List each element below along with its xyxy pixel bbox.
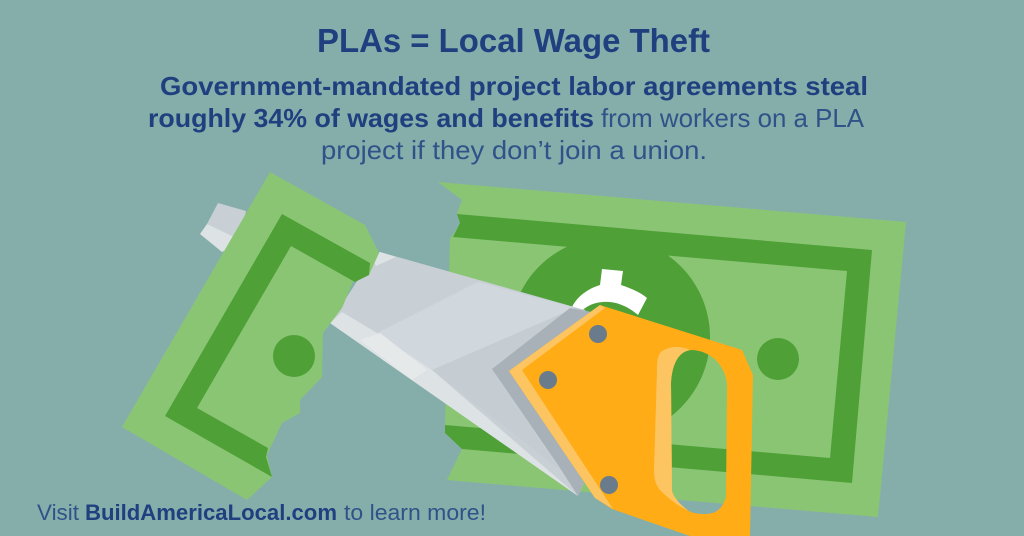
subtitle text block: from workers on a PLA bbox=[601, 103, 865, 133]
bill centre circle bbox=[510, 237, 710, 437]
title: PLAs = Local Wage Theft bbox=[317, 22, 710, 59]
illustration: right part of torn dollar bill bbox=[438, 182, 906, 517]
dollar sign bbox=[572, 269, 647, 315]
footer call to action: Visit bbox=[37, 500, 79, 525]
illustration: saw bbox=[200, 203, 753, 536]
illustration: left torn piece of bill bbox=[122, 172, 379, 500]
rivet top bbox=[589, 325, 607, 343]
handle highlight edge bbox=[509, 305, 613, 509]
bill right circle bbox=[757, 338, 799, 380]
subtitle text block: project if they don’t join a union. bbox=[321, 135, 707, 165]
handle grip highlight bbox=[654, 347, 690, 510]
saw handle bbox=[509, 305, 753, 536]
saw blade tang bbox=[200, 203, 246, 252]
subtitle text block: Government-mandated project labor agreements steal bbox=[160, 71, 868, 101]
footer call to action: BuildAmericaLocal.com bbox=[85, 500, 337, 525]
footer call to action: to learn more! bbox=[344, 500, 486, 525]
rivet bottom bbox=[600, 476, 618, 494]
rivet left bbox=[539, 371, 557, 389]
subtitle text block bbox=[148, 71, 868, 165]
footer call to action bbox=[37, 500, 486, 525]
subtitle text block: roughly 34% of wages and benefits bbox=[148, 103, 594, 133]
left bill circle bbox=[273, 335, 315, 377]
saw blade bbox=[330, 252, 592, 496]
